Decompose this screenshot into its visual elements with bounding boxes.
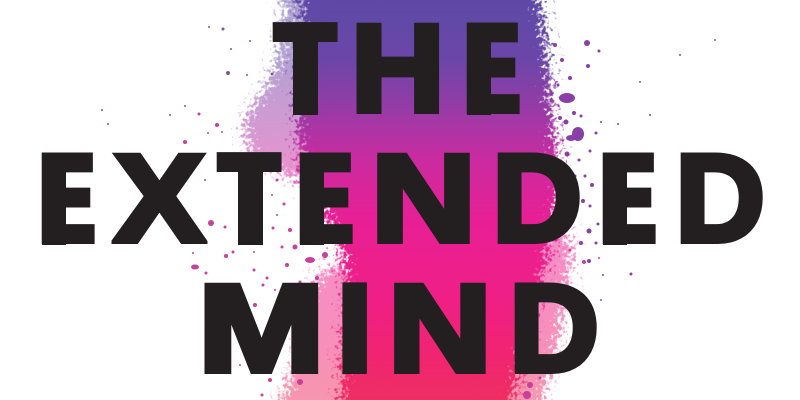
title line: THE: H [351,0,445,138]
title line: EXTENDED: E [599,130,657,268]
title line: EXTENDED: D [675,130,765,268]
grey-purple specks on the upper left [101,26,716,181]
title line: MIND: N [388,260,492,398]
title line: EXTENDED: E [38,130,96,268]
title line: THE: E [463,0,521,138]
title line: EXTENDED [38,130,765,268]
title line: EXTENDED: E [296,130,354,268]
title line: THE [272,0,521,138]
title line: EXTENDED: D [492,130,582,268]
title line: MIND: D [509,260,599,398]
pink specks on the left and right [183,112,602,399]
powder explosion background [101,0,716,400]
title line: MIND [198,260,599,398]
title line: EXTENDED: N [371,130,476,268]
purple chunks and specks on the right [553,40,651,276]
title line: THE: T [274,0,336,138]
title line: MIND: M [198,260,325,398]
title line: MIND: I [337,260,373,398]
title line: EXTENDED: T [218,130,280,268]
title line: EXTENDED: X [114,130,205,268]
